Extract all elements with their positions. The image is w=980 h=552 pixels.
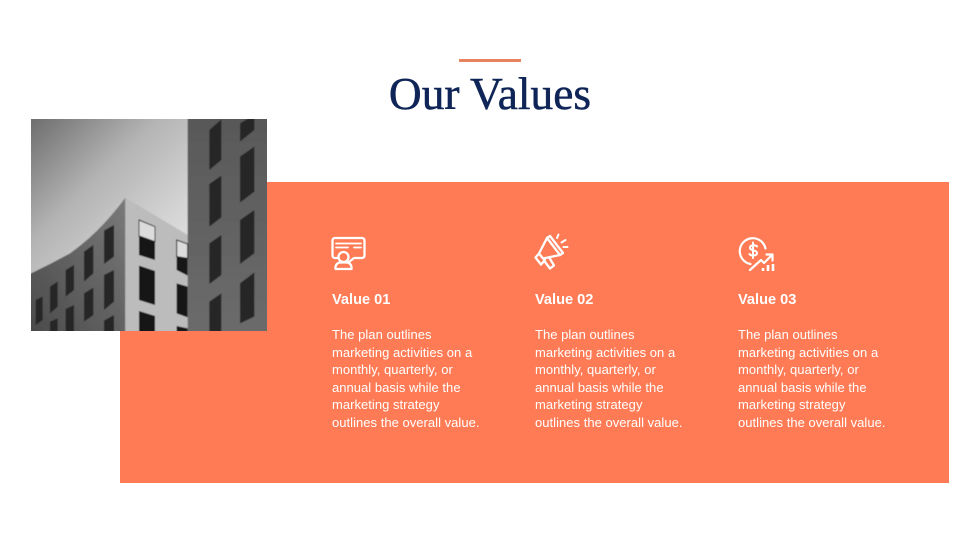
text: Value 02 description: marketing strategy xyxy=(535,397,642,412)
text: Value 03 description: annual basis while the xyxy=(738,380,867,395)
text: Value 02 description: outlines the overall value. xyxy=(535,415,683,430)
text: Value 02 description: marketing activities on a xyxy=(535,345,675,360)
photo: grayscale building xyxy=(31,119,267,331)
text: Value 03 description: outlines the overall value. xyxy=(738,415,886,430)
icon: dollar coin with growth arrow xyxy=(738,237,774,272)
heading: Value 02: Value 02 xyxy=(535,292,593,308)
text: Value 03 description xyxy=(738,327,886,430)
text: Value 02 description: The plan outlines xyxy=(535,327,635,342)
text: Value 01 description: monthly, quarterly, or xyxy=(332,362,453,377)
text: Value 03 description: monthly, quarterly, or xyxy=(738,362,859,377)
text: Value 03 description: The plan outlines xyxy=(738,327,838,342)
accent line xyxy=(459,59,521,62)
text: Value 01 description: annual basis while the xyxy=(332,380,461,395)
text: Value 02 description: annual basis while the xyxy=(535,380,664,395)
text: Value 03 description: marketing strategy xyxy=(738,397,845,412)
text: Value 01 description: The plan outlines xyxy=(332,327,432,342)
text: Value 01 description: marketing activities on a xyxy=(332,345,472,360)
panel: orange background xyxy=(120,182,949,483)
heading: Value 01: Value 01 xyxy=(332,292,390,308)
text: Value 02 description: monthly, quarterly, or xyxy=(535,362,656,377)
title: Our Values xyxy=(389,69,591,119)
text: Value 01 description xyxy=(332,327,480,430)
heading: Value 03: Value 03 xyxy=(738,292,796,308)
text: Value 02 description xyxy=(535,327,683,430)
text: Value 03 description: marketing activities on a xyxy=(738,345,878,360)
icon: presenter with speech board xyxy=(331,236,366,270)
text: Value 01 description: marketing strategy xyxy=(332,397,439,412)
icon: megaphone xyxy=(534,234,568,270)
text: Value 01 description: outlines the overall value. xyxy=(332,415,480,430)
